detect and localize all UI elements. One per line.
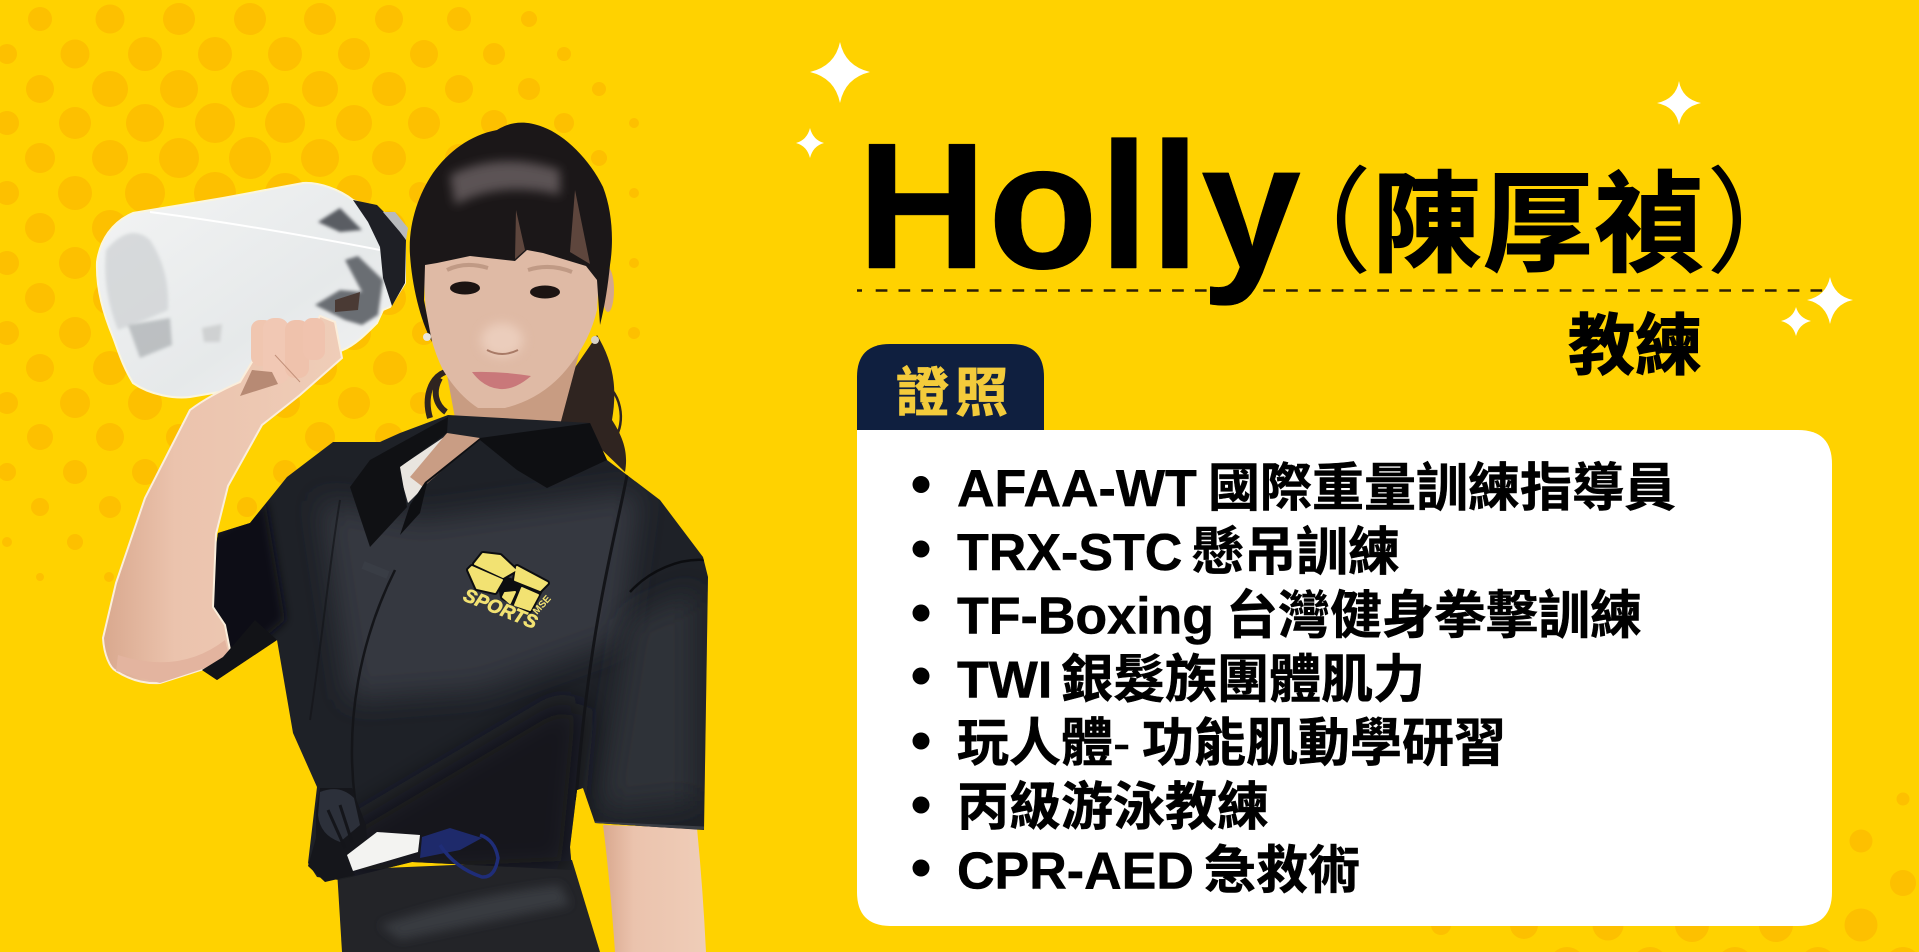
sparkle: top left large — [810, 42, 870, 103]
shirt right sleeve highlight — [600, 590, 695, 810]
shirt chest highlight — [320, 490, 640, 700]
list item 2 — [912, 524, 1400, 582]
shirt logo — [460, 554, 554, 634]
list item 4: 銀髮族團體肌力 — [1061, 651, 1425, 709]
list item 6: 丙級游泳教練 — [957, 779, 1269, 837]
list item 5 — [912, 715, 1506, 773]
lips — [472, 372, 531, 389]
tab: certificates heading: 證照 — [896, 364, 1014, 423]
list item 5: - — [1113, 715, 1130, 773]
sparkle: right small — [1781, 307, 1811, 336]
pants — [337, 860, 600, 952]
ear — [602, 268, 614, 312]
dashed divider — [857, 289, 1824, 292]
ponytail — [555, 335, 626, 472]
list item 4: TWI — [957, 651, 1052, 709]
title: name: （ — [1257, 160, 1372, 288]
sleeve tip over arm — [202, 620, 277, 680]
shirt logo: SPORTS — [460, 585, 540, 634]
bottle reflections — [105, 233, 168, 330]
list item 7: 急救術 — [1204, 843, 1360, 901]
tab: certificates heading — [857, 344, 1044, 431]
hair sheen — [450, 161, 560, 205]
halftone dots: top left — [0, 3, 640, 582]
title: name: ） — [1706, 160, 1821, 288]
eyes — [450, 282, 480, 294]
list item 3: 台灣健身拳擊訓練 — [1226, 588, 1642, 646]
list item 3 — [912, 588, 1642, 646]
sparkle: top right — [1657, 81, 1701, 125]
list item 2: 懸吊訓練 — [1192, 524, 1400, 582]
shirt left sleeve shadow — [205, 500, 285, 680]
hair — [410, 123, 612, 342]
list item 1: 國際重量訓練指導員 — [1208, 460, 1676, 518]
collar right — [400, 423, 607, 535]
left hair curl — [428, 372, 446, 418]
list item 5: 功能肌動學研習 — [1142, 715, 1506, 773]
lower right arm — [603, 825, 706, 952]
fingers — [251, 320, 273, 366]
undershirt — [398, 435, 447, 503]
title: name: Holly — [857, 106, 1302, 307]
subtitle: coach: 教練 — [1568, 309, 1702, 384]
list item 5: 玩人體 — [957, 715, 1113, 773]
list item 1: AFAA-WT — [957, 460, 1197, 518]
neck — [447, 350, 580, 450]
face — [423, 225, 600, 408]
eyebrows — [447, 265, 572, 272]
neck V — [410, 433, 480, 487]
knot — [308, 788, 368, 882]
list item 7: CPR-AED — [957, 843, 1194, 901]
head — [410, 123, 614, 408]
face mask tucked at waist — [347, 828, 498, 877]
shirt waist shadow — [340, 700, 585, 880]
person: coach holding a water bottle — [97, 123, 708, 952]
arm and hand — [103, 316, 342, 683]
shirt logo: MSE — [531, 593, 554, 617]
list item 3: TF-Boxing — [957, 588, 1214, 646]
bottle number mark — [202, 324, 222, 342]
earrings — [423, 333, 431, 341]
title: name: 陳厚禎 — [1372, 164, 1705, 287]
bottle cap — [353, 200, 406, 306]
list item 2: TRX-STC — [957, 524, 1182, 582]
list item 7 — [912, 843, 1360, 901]
shirt — [202, 415, 708, 880]
sparkle: top left small — [796, 128, 824, 158]
list item 1 — [912, 460, 1676, 518]
panel: certificates list — [857, 430, 1832, 926]
water bottle — [97, 183, 408, 397]
nose — [481, 323, 523, 357]
sparkle: right large — [1807, 277, 1853, 324]
collar left — [350, 417, 448, 547]
halftone dots: bottom right — [1431, 792, 1919, 952]
